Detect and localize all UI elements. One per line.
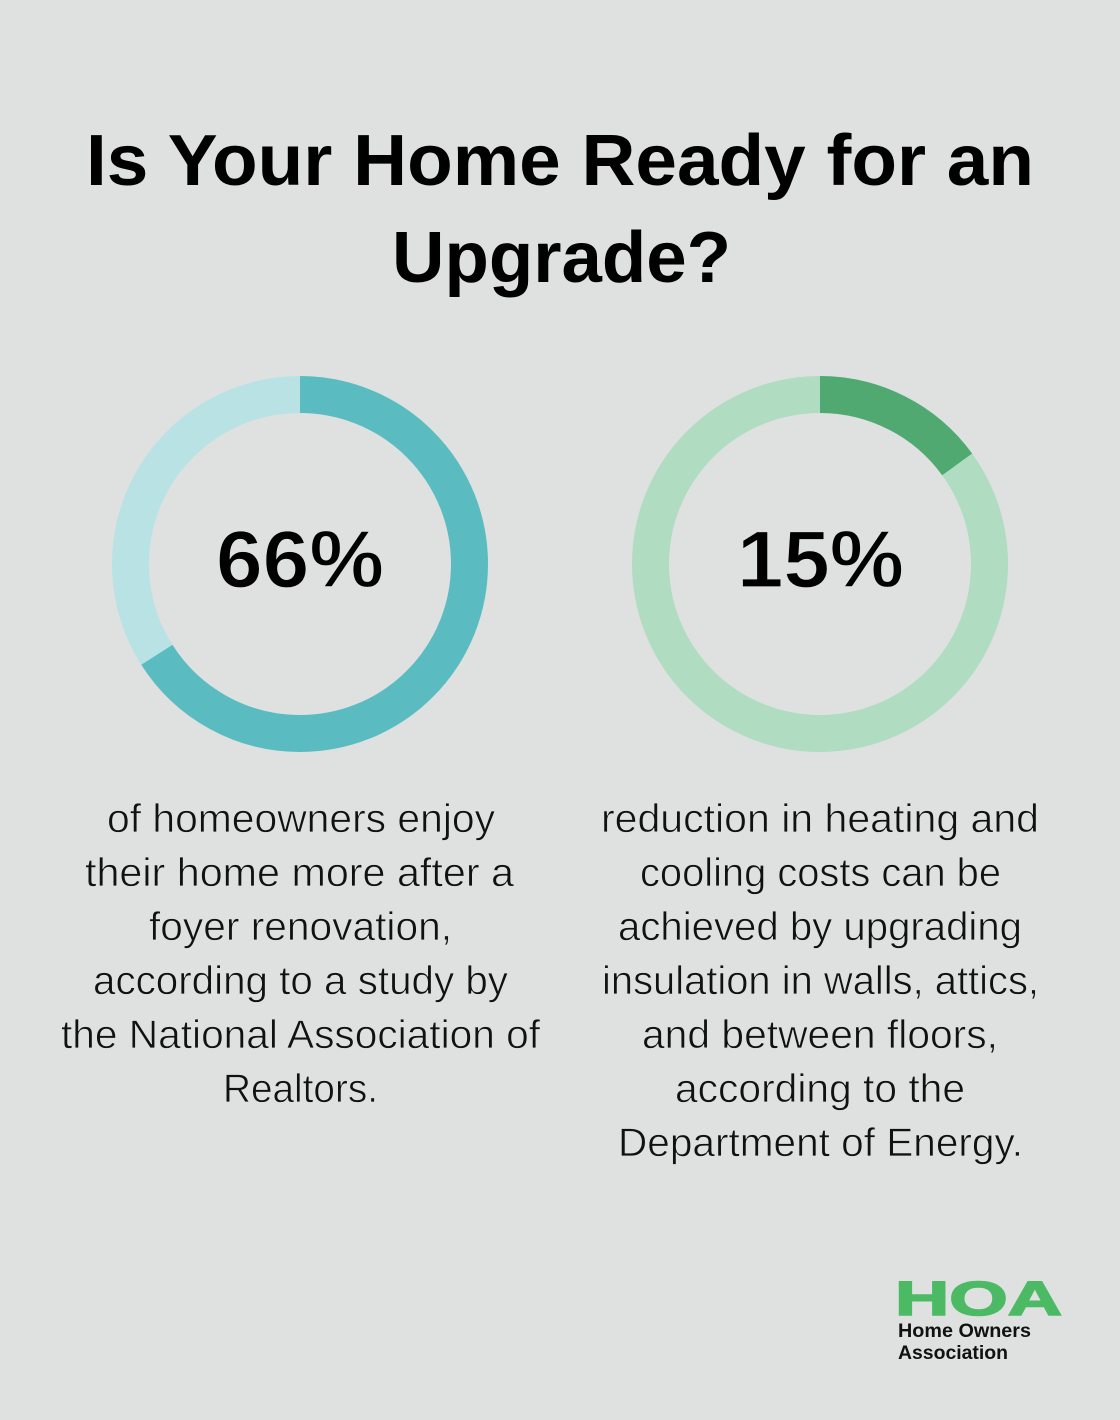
description: heating and cooling: cooling costs can be [640, 851, 1001, 895]
description: heating and cooling: Department of Energy. [618, 1121, 1023, 1165]
panel: 15% statistic [601, 394, 1039, 1165]
description: homeowners: foyer renovation, [149, 905, 452, 949]
description: heating and cooling: and between floors, [642, 1013, 998, 1057]
description: homeowners [61, 797, 541, 1111]
panel: 66% statistic [61, 394, 541, 1111]
description: homeowners: their home more after a [85, 851, 515, 895]
description: homeowners: according to a study by [93, 959, 508, 1003]
value: 15%: 15% [737, 515, 904, 605]
title: Is Your Home Ready for an [86, 121, 1034, 201]
logo: HOA Home Owners Association: HOA [895, 1273, 1062, 1326]
logo: HOA Home Owners Association: Home Owners [898, 1321, 1031, 1342]
description: heating and cooling: achieved by upgrading [618, 905, 1022, 949]
title: Upgrade? [392, 218, 731, 298]
title [86, 121, 1034, 298]
description: homeowners: of homeowners enjoy [107, 797, 495, 841]
description: heating and cooling: according to the [675, 1067, 965, 1111]
description: heating and cooling: insulation in walls, attics, [602, 959, 1039, 1003]
value: 66%: 66% [216, 515, 384, 605]
description: heating and cooling: reduction in heating and [601, 797, 1039, 841]
logo: HOA Home Owners Association: Association [898, 1343, 1008, 1364]
description: homeowners: Realtors. [223, 1067, 378, 1111]
description: homeowners: the National Association of [61, 1013, 541, 1057]
donut chart: 15% [650, 394, 990, 734]
donut chart: 66% [130, 394, 470, 734]
description: heating and cooling [601, 797, 1039, 1165]
logo: HOA Home Owners Association [895, 1273, 1062, 1364]
